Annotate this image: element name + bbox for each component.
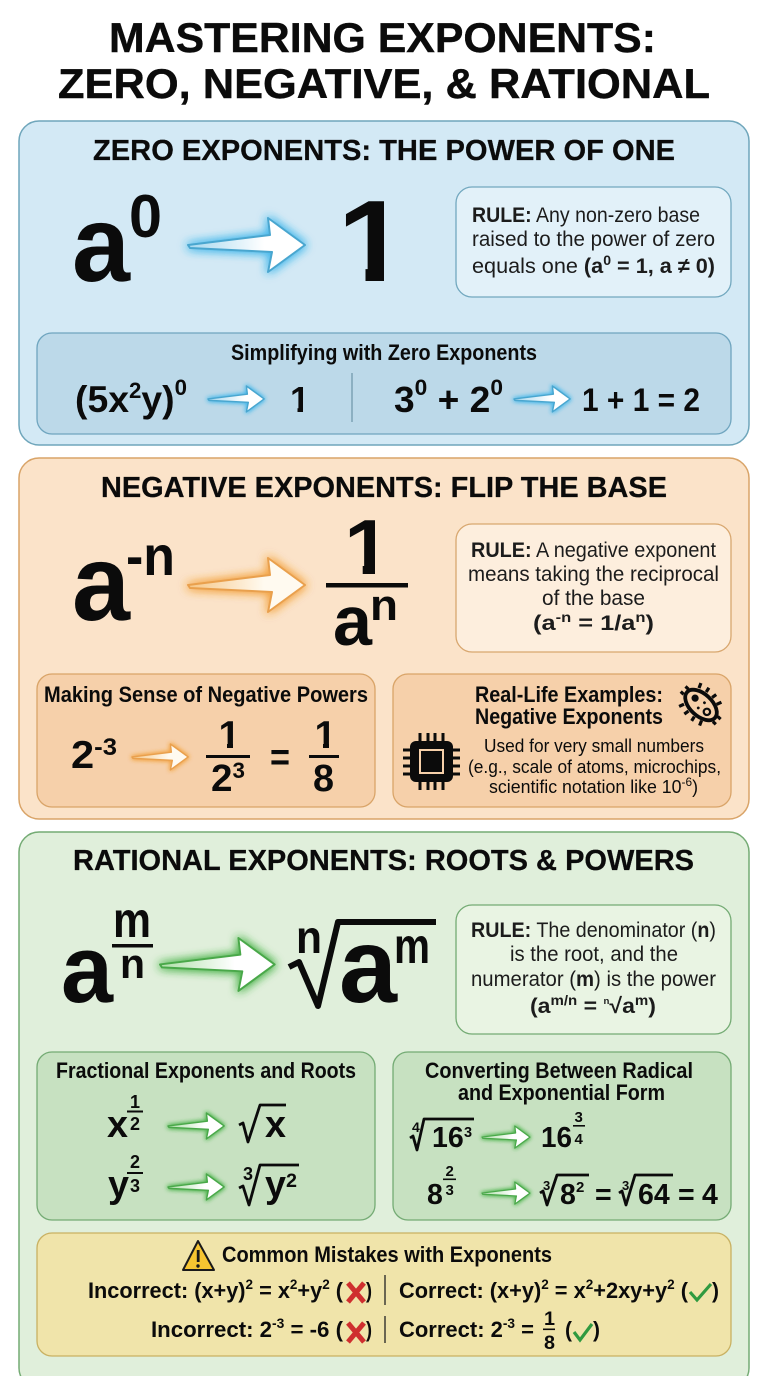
subheading: fractional exponents: Fractional Exponents and Roots (56, 1058, 356, 1083)
mistake row one correct: +2xy+y (593, 1278, 668, 1303)
formula: 8 to two thirds (427, 1163, 456, 1211)
arrow: small green two (168, 1174, 224, 1200)
rule box: rational: √a (609, 994, 636, 1018)
rule box: zero: equals one (a (472, 254, 603, 278)
icon: microchip (403, 733, 460, 790)
rule box: rational: m/n (551, 992, 577, 1008)
result: 16 to three quarters: 16 (541, 1122, 572, 1154)
sub panel: simplifying (37, 333, 731, 434)
formula: fourth root of 16 cubed: 16 (432, 1122, 464, 1154)
description: small numbers: ) (692, 777, 698, 797)
subheading: common mistakes: Common Mistakes with Exponents (222, 1242, 552, 1267)
fraction: one over two cubed: 3 (233, 758, 245, 783)
result: 16 to three quarters (541, 1109, 585, 1154)
description: small numbers: (e.g., scale of atoms, microchips, (468, 757, 721, 777)
rule box: zero (456, 187, 731, 297)
result: cube root of y squared (239, 1164, 299, 1206)
fraction: one over two cubed: 2 (211, 758, 232, 800)
rule box: rational: numerator (m) is the power (471, 967, 716, 991)
subheading: simplifying: Simplifying with Zero Exponents (231, 340, 537, 365)
example: base expression: 0 (175, 375, 187, 400)
sub panel: fractional exponents (37, 1052, 375, 1220)
result: evaluated root equals 4: 64 (638, 1179, 670, 1211)
result: one: 1 (337, 176, 410, 306)
example: two to minus three: 2 (71, 734, 93, 777)
result: evaluated root equals 4: = (595, 1179, 612, 1211)
example: sum of powers: + 2 (427, 379, 490, 420)
fraction: one eighth (309, 721, 339, 792)
equals sign: = (270, 737, 290, 779)
arrow: small blue two (514, 386, 570, 412)
mistake row one incorrect: 2 (246, 1276, 253, 1292)
formula: a to the minus n (72, 522, 175, 643)
formula: a to the zero: a (72, 183, 131, 304)
mistake row two incorrect: -3 (272, 1315, 285, 1331)
mistake row one incorrect: 2 (322, 1276, 330, 1292)
rule box: negative: = 1/a (571, 611, 637, 635)
result: evaluated root equals 4: 4 (702, 1179, 718, 1211)
subheading: making sense: Making Sense of Negative Powers (44, 682, 368, 707)
description: small numbers (468, 736, 721, 797)
arrow: small green (168, 1113, 224, 1139)
example: sum of powers: 0 (490, 375, 503, 400)
result: reciprocal fraction: 1 (344, 503, 392, 591)
result: reciprocal fraction: n (370, 581, 398, 630)
mistake row one incorrect: +y (297, 1278, 323, 1303)
result: 16 to three quarters: 4 (574, 1131, 584, 1148)
formula: fourth root of 16 cubed (410, 1119, 474, 1154)
rule box: rational: is the root, and the (510, 942, 678, 966)
rule box: rational: m (635, 992, 648, 1008)
example: sum of powers: 0 (415, 375, 427, 400)
mistake row two correct: ( (565, 1317, 572, 1342)
formula: 8 to two thirds: 8 (427, 1179, 443, 1211)
subheading: real-life examples: Real-Life Examples: (475, 682, 663, 707)
rule box: negative: RULE: A negative exponent (471, 538, 716, 562)
result: square root of x (239, 1104, 286, 1146)
arrow: small blue (208, 386, 264, 412)
heading: rational exponents: RATIONAL EXPONENTS: ROOTS & POWERS (73, 845, 694, 877)
title (58, 14, 710, 107)
formula: y to two thirds: 3 (130, 1176, 140, 1196)
mistake row one correct: ) (712, 1278, 719, 1303)
sub panel: real-life examples (393, 674, 731, 807)
rule box: negative: means taking the reciprocal (468, 562, 719, 586)
example: base expression: y) (141, 379, 175, 420)
formula: a to m over n (61, 892, 153, 1023)
mistake row one incorrect (88, 1276, 372, 1303)
mistake row one incorrect: ) (366, 1278, 372, 1303)
result: reciprocal fraction (326, 520, 408, 646)
mistake row one incorrect: = x (253, 1278, 290, 1303)
rule box: rational: RULE: The denominator (n) (471, 918, 716, 942)
fraction: one eighth: 1 (314, 714, 336, 757)
formula: a to m over n: n (120, 940, 145, 987)
mistake row one incorrect: 2 (290, 1276, 298, 1292)
mistake row two correct: = (515, 1317, 534, 1342)
result: nth root of a to the m: a (339, 907, 398, 1025)
result: reciprocal fraction: a (333, 582, 373, 660)
rule box: negative: -n (556, 609, 571, 625)
example: base expression: (5x (75, 379, 128, 420)
formula: x to one half: 2 (130, 1114, 140, 1134)
rule box: rational: (a (530, 994, 549, 1018)
example result: one: 1 (290, 379, 310, 420)
rule box: rational: ) (648, 994, 656, 1018)
mistake row one correct: 2 (541, 1276, 549, 1292)
rule box: negative: n (635, 609, 646, 625)
example result: sum: 1 + 1 = 2 (582, 382, 700, 418)
formula: x to one half (107, 1092, 143, 1146)
result: nth root of a to the m (289, 907, 436, 1025)
arrow: green (160, 938, 275, 991)
example: sum of powers: 3 (394, 379, 414, 420)
mistake row one correct: 2 (667, 1276, 675, 1292)
result: 16 to three quarters: 3 (574, 1109, 583, 1126)
formula: a to the minus n: -n (126, 524, 175, 587)
title: ZERO, NEGATIVE, & RATIONAL (58, 60, 710, 107)
arrow: orange (188, 558, 305, 612)
formula: a to the zero: 0 (129, 183, 162, 250)
description: small numbers: Used for very small numbers (484, 736, 704, 756)
mistake row two correct: Correct: 2 (399, 1317, 505, 1342)
arrow: blue (188, 218, 305, 272)
example: base expression: 2 (129, 378, 141, 403)
result: nth root of a to the m: m (394, 918, 430, 974)
rule box: zero: raised to the power of zero (472, 227, 715, 251)
formula: fourth root of 16 cubed: 4 (412, 1119, 420, 1135)
mistake row one incorrect: Incorrect: (x+y) (88, 1278, 251, 1303)
rule box: negative: (a (533, 611, 552, 635)
subheading: converting forms: Converting Between Radical (425, 1058, 693, 1083)
heading: zero exponents: ZERO EXPONENTS: THE POWER OF ONE (93, 135, 675, 167)
formula: 8 to two thirds: 2 (446, 1163, 454, 1180)
result: nth root of a to the m: n (296, 911, 322, 963)
icon: warning triangle (183, 1241, 214, 1270)
formula: y to two thirds: y (108, 1164, 129, 1206)
result: evaluated root equals 4: 3 (622, 1178, 629, 1193)
arrow: small orange (132, 744, 188, 770)
sub panel: converting forms (393, 1052, 731, 1220)
panel: rational exponents (19, 832, 749, 1376)
sub panel: common mistakes (37, 1233, 731, 1356)
rule box: zero: 0 (603, 252, 611, 268)
arrow: small green four (482, 1182, 530, 1204)
description: small numbers: -6 (682, 775, 692, 789)
title: MASTERING EXPONENTS: (109, 14, 656, 61)
mistake row two correct: 8 (544, 1333, 555, 1354)
rule box: rational: n (604, 996, 609, 1006)
rule box: zero: = 1, a ≠ 0) (611, 254, 715, 278)
formula: x to one half: 1 (130, 1092, 140, 1112)
formula: a to the minus n: a (72, 522, 131, 643)
icon: bacteria (671, 675, 731, 735)
mistake row two correct: ) (593, 1317, 600, 1342)
fraction: one over two cubed: 1 (218, 714, 240, 757)
formula: a to m over n: m (113, 892, 151, 948)
formula: a to m over n: a (61, 916, 114, 1023)
formula: x to one half: x (107, 1104, 128, 1146)
mistake row one correct: 2 (586, 1276, 593, 1292)
result: cube root of y squared: 3 (243, 1164, 253, 1184)
heading: negative exponents: NEGATIVE EXPONENTS: FLIP THE BASE (101, 472, 667, 504)
formula: y to two thirds (108, 1152, 143, 1206)
formula: fourth root of 16 cubed: 3 (464, 1125, 472, 1141)
mistake row one correct: = x (549, 1278, 586, 1303)
subheading: converting forms (425, 1058, 693, 1105)
mistake row two incorrect: = -6 ( (284, 1317, 343, 1342)
rule box: rational (456, 905, 731, 1034)
rule box: negative (456, 524, 731, 652)
mistake row two correct: 1 (544, 1309, 555, 1330)
subheading: converting forms: and Exponential Form (458, 1080, 665, 1105)
formula: a to the zero (72, 183, 162, 304)
result: evaluated root equals 4: 2 (576, 1179, 584, 1196)
result: square root of x: x (265, 1104, 286, 1146)
formula: 8 to two thirds: 3 (446, 1182, 454, 1199)
example: two to minus three: -3 (94, 734, 117, 761)
mistake row two incorrect: Incorrect: 2 (151, 1317, 274, 1342)
mistake row two correct (399, 1309, 600, 1354)
mistake row two correct: -3 (503, 1315, 515, 1331)
formula: y to two thirds: 2 (130, 1152, 140, 1172)
sub panel: making sense (37, 674, 375, 807)
mistake row two incorrect (151, 1315, 372, 1342)
result: evaluated root equals 4: = (678, 1179, 695, 1211)
result: evaluated root equals 4: 8 (560, 1179, 576, 1211)
mistake row one correct (399, 1276, 719, 1303)
rule box: zero: RULE: Any non-zero base (472, 203, 700, 227)
panel: negative exponents (19, 458, 749, 819)
mistake row one correct: Correct: (x+y) (399, 1278, 546, 1303)
rule box: rational: = (577, 994, 604, 1018)
subheading: real-life examples (475, 682, 663, 729)
result: cube root of y squared: 2 (286, 1171, 297, 1192)
rule box: negative: of the base (542, 586, 645, 610)
result: evaluated root equals 4 (540, 1175, 718, 1211)
result: evaluated root equals 4: 3 (543, 1178, 550, 1193)
description: small numbers: scientific notation like 10 (489, 777, 684, 797)
fraction: one eighth: 8 (313, 758, 334, 800)
mistake row one incorrect: ( (330, 1278, 343, 1303)
fraction: one over two cubed (206, 721, 250, 791)
result: cube root of y squared: y (265, 1164, 286, 1206)
rule box: negative: ) (646, 611, 654, 635)
mistake row two incorrect: ) (366, 1317, 372, 1342)
subheading: real-life examples: Negative Exponents (475, 704, 663, 729)
mistake row one correct: ( (675, 1278, 688, 1303)
arrow: small green three (482, 1126, 530, 1148)
